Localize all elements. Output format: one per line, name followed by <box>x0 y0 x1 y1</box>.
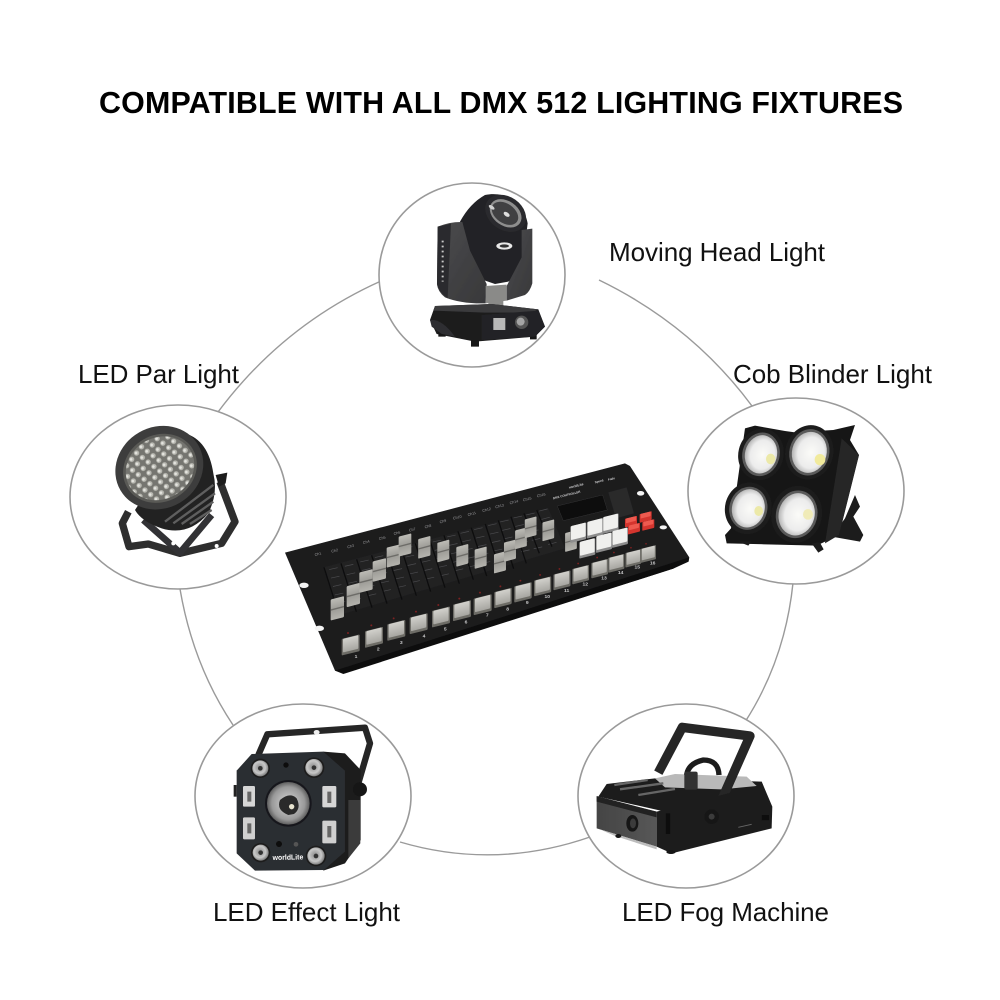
icon: LED effect light: worldLite <box>272 852 303 862</box>
red buttons <box>625 511 654 534</box>
brand and model text: Fade <box>608 476 616 482</box>
channel labels: Ch3 <box>347 544 354 549</box>
brand and model text <box>553 476 616 500</box>
button numbers: 15 <box>635 565 640 571</box>
channel labels: Ch2 <box>331 548 338 554</box>
button numbers: 16 <box>650 561 656 567</box>
LCD screen <box>557 495 607 521</box>
label: cob blinder light: Cob Blinder Light <box>733 359 933 389</box>
button numbers: 13 <box>601 576 607 582</box>
label: LED effect light: LED Effect Light <box>213 897 401 927</box>
white function buttons <box>570 513 628 559</box>
channel labels: Ch15 <box>523 496 532 502</box>
channel labels: Ch6 <box>393 530 401 536</box>
button numbers: 14 <box>618 570 624 576</box>
speed and fade sliders <box>608 487 634 518</box>
channel labels: Ch4 <box>363 539 370 545</box>
channel labels: Ch14 <box>509 499 519 505</box>
channel labels: Ch5 <box>379 535 386 541</box>
faders <box>331 516 577 621</box>
channel labels: Ch13 <box>495 503 504 509</box>
channel labels: Ch10 <box>453 515 462 521</box>
channel labels: Ch16 <box>537 492 546 498</box>
circle: LED par light <box>70 405 286 589</box>
button numbers: 7 <box>486 613 489 619</box>
channel labels: Ch8 <box>424 524 432 529</box>
button numbers: 5 <box>444 626 447 632</box>
label: LED par light: LED Par Light <box>78 359 240 389</box>
title: COMPATIBLE WITH ALL DMX 512 LIGHTING FIXTURES <box>99 86 903 120</box>
brand and model text: Speed <box>594 478 604 484</box>
circle: LED effect light <box>195 704 411 888</box>
channel labels <box>314 492 546 557</box>
mounting holes <box>299 491 667 631</box>
button numbers: 1 <box>355 654 358 660</box>
icon: LED effect light <box>234 728 370 871</box>
controller panel <box>285 463 689 673</box>
flash buttons <box>342 543 656 656</box>
button numbers: 10 <box>545 594 550 600</box>
channel labels: Ch12 <box>482 507 491 513</box>
connecting ring between fixtures <box>180 280 793 855</box>
button numbers: 4 <box>423 633 426 639</box>
icon: moving head light <box>430 187 545 347</box>
button numbers: 12 <box>583 582 588 588</box>
channel labels: Ch9 <box>439 519 447 524</box>
button numbers <box>355 561 656 660</box>
icon: LED par light <box>100 410 235 553</box>
button numbers: 3 <box>400 640 403 646</box>
fader tracks <box>323 508 565 616</box>
icon: cob blinder light <box>719 420 863 553</box>
channel labels: Ch11 <box>467 511 476 517</box>
icon: LED fog machine <box>597 727 772 854</box>
button numbers: 2 <box>377 647 380 653</box>
channel labels: Ch7 <box>409 527 416 533</box>
circle: moving head light <box>379 183 565 367</box>
channel labels: Ch1 <box>314 551 322 557</box>
button numbers: 9 <box>526 600 529 606</box>
brand and model text: DMX CONTROLLER <box>553 489 582 500</box>
circle: LED fog machine <box>578 704 794 888</box>
button numbers: 11 <box>564 588 569 594</box>
circle: cob blinder light <box>688 398 904 584</box>
brand and model text: worldLite <box>568 482 584 490</box>
button numbers: 8 <box>506 607 509 613</box>
DMX controller <box>285 463 689 674</box>
label: LED fog machine: LED Fog Machine <box>622 897 829 927</box>
label: moving head light: Moving Head Light <box>609 237 826 267</box>
button numbers: 6 <box>465 619 468 625</box>
